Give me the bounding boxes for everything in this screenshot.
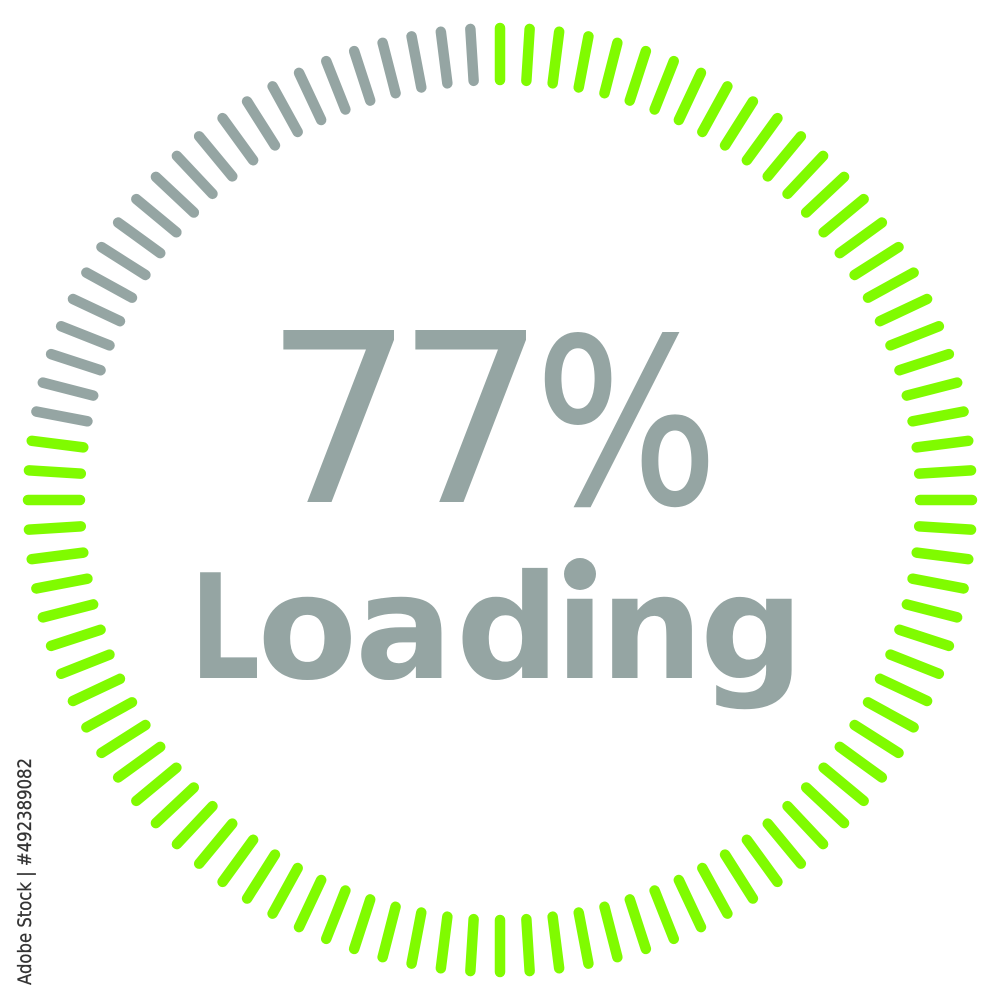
loading label: L bbox=[190, 544, 260, 713]
stock image id, vertical: Adobe Stock | #492389082 bbox=[14, 758, 36, 985]
loading label: oading bbox=[258, 544, 804, 713]
progress ring: gray remaining ticks bbox=[36, 0, 474, 434]
percentage value: 77 bbox=[264, 283, 546, 558]
percent sign: % bbox=[535, 291, 718, 558]
round dot of the letter i bbox=[560, 556, 600, 593]
